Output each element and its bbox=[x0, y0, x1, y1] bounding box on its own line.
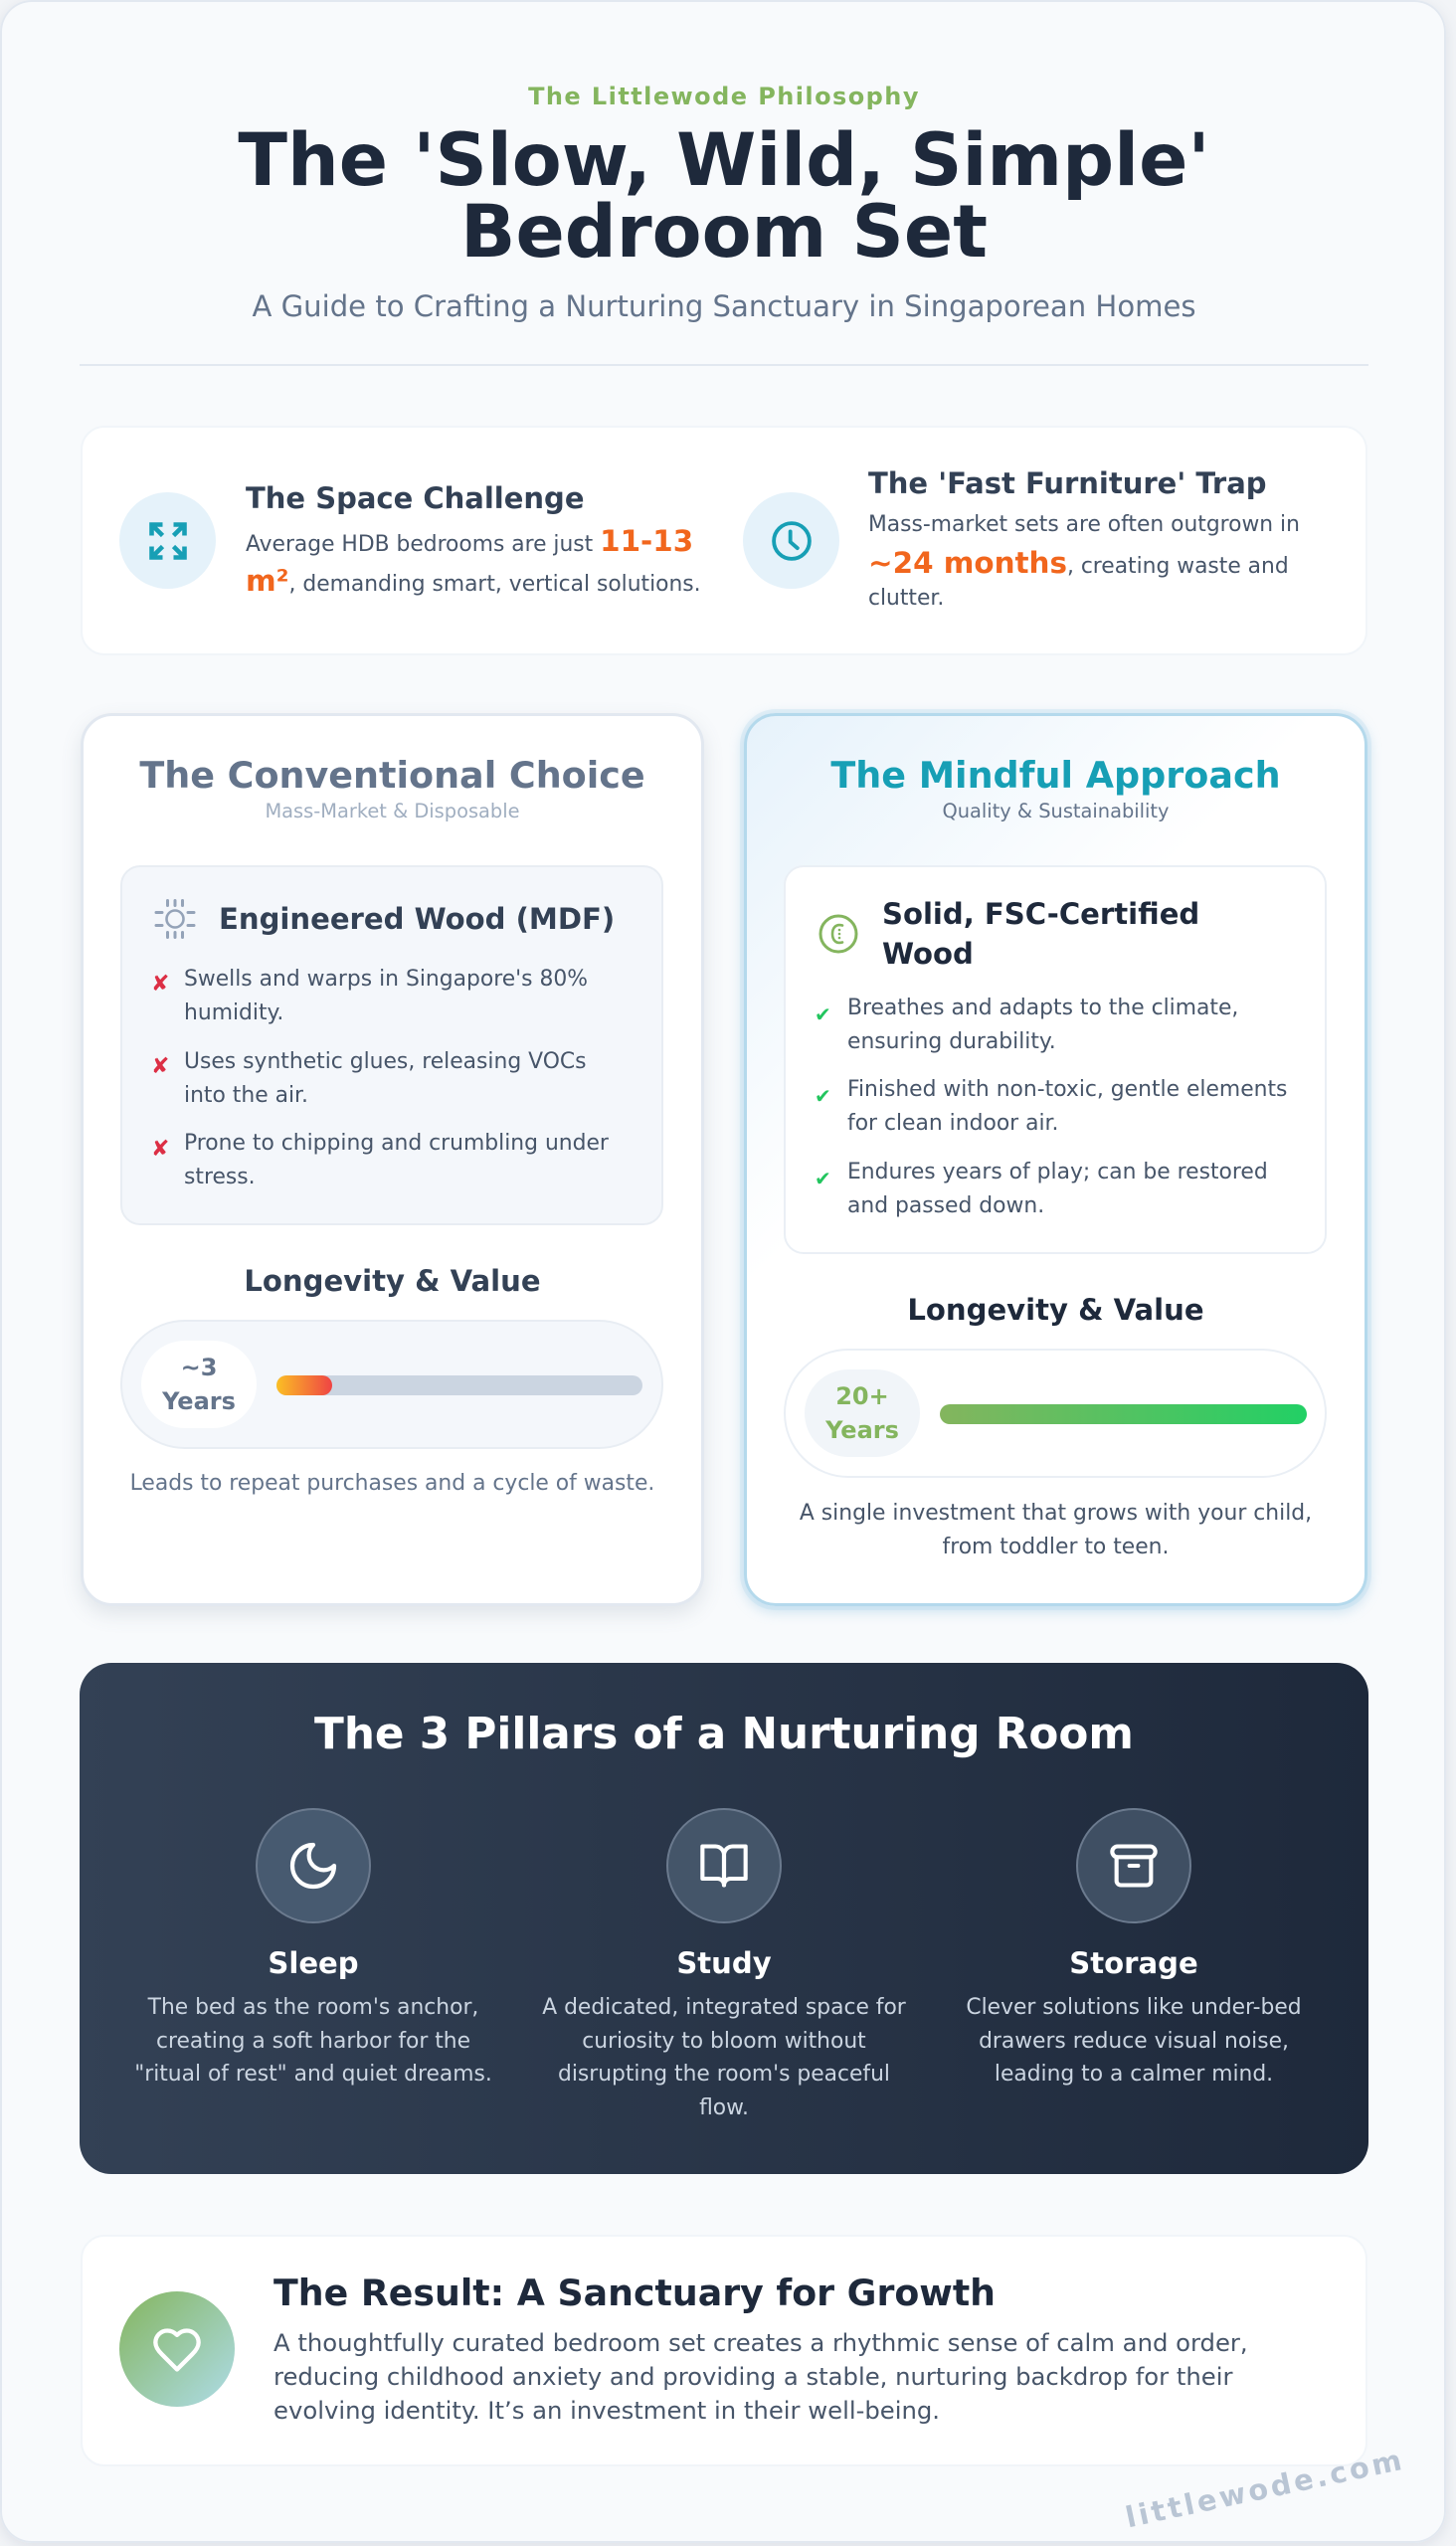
drawback 3 bbox=[151, 1131, 609, 1189]
list: benefits bbox=[815, 996, 1287, 1218]
body text: m², demanding smart, vertical solutions. bbox=[246, 564, 701, 598]
panel: the result bbox=[81, 2235, 1367, 2466]
stat: the space challenge bbox=[246, 481, 701, 598]
drawback 2 bbox=[151, 1049, 587, 1108]
drawback 1 bbox=[151, 967, 588, 1025]
panel: the 3 pillars bbox=[80, 1663, 1368, 2174]
description: leading to a calmer mind. bbox=[995, 2062, 1273, 2087]
benefit 2: Finished with non-toxic, gentle elements bbox=[847, 1077, 1287, 1102]
years badge bbox=[805, 1369, 920, 1457]
drawback 1: humidity. bbox=[184, 1000, 283, 1025]
body text: Average HDB bedrooms are just 11-13 bbox=[246, 524, 693, 558]
note: from toddler to teen. bbox=[943, 1535, 1169, 1559]
description bbox=[966, 1995, 1302, 2087]
bar bbox=[276, 1375, 642, 1395]
heading: The Space Challenge bbox=[246, 481, 584, 515]
heading: The Result: A Sanctuary for Growth bbox=[273, 2272, 996, 2314]
note: A single investment that grows with your child, bbox=[800, 1501, 1312, 1526]
title: Bedroom Set bbox=[460, 191, 988, 274]
icon: certified bbox=[819, 915, 857, 953]
years badge bbox=[141, 1341, 257, 1428]
watermark: littlewode.com bbox=[1123, 2443, 1407, 2534]
drawback 2: Uses synthetic glues, releasing VOCs bbox=[184, 1049, 587, 1074]
years badge: 20+ bbox=[835, 1382, 889, 1410]
benefit 1: ✔ bbox=[815, 1002, 831, 1026]
benefit 2 bbox=[815, 1077, 1287, 1136]
bar bbox=[940, 1404, 1307, 1424]
benefit 2: for clean indoor air. bbox=[847, 1111, 1058, 1136]
benefit 3: ✔ bbox=[815, 1167, 831, 1190]
description: A dedicated, integrated space for bbox=[542, 1995, 906, 2020]
material heading: Engineered Wood (MDF) bbox=[219, 902, 615, 936]
benefit 3: and passed down. bbox=[847, 1193, 1044, 1218]
drawback 2: into the air. bbox=[184, 1083, 308, 1108]
heading: The Conventional Choice bbox=[139, 754, 645, 797]
description: Clever solutions like under-bed bbox=[966, 1995, 1302, 2020]
subheading: Quality & Sustainability bbox=[942, 800, 1170, 822]
pillar: study bbox=[542, 1808, 906, 2120]
panel: the conventional choice bbox=[81, 713, 704, 1606]
drawback 1: Swells and warps in Singapore's 80% bbox=[184, 967, 588, 992]
drawback 3: stress. bbox=[184, 1165, 256, 1189]
material heading: Solid, FSC-Certified bbox=[882, 897, 1199, 931]
years badge: Years bbox=[825, 1416, 899, 1444]
heading: The Mindful Approach bbox=[830, 754, 1281, 797]
pillar: sleep bbox=[134, 1808, 492, 2087]
body text: ~24 months, creating waste and bbox=[868, 546, 1289, 580]
description: drawers reduce visual noise, bbox=[979, 2029, 1289, 2054]
longevity meter bbox=[784, 1349, 1327, 1478]
benefit 1: Breathes and adapts to the climate, bbox=[847, 996, 1238, 1020]
body text bbox=[246, 524, 701, 598]
header bbox=[80, 83, 1368, 366]
description: flow. bbox=[699, 2095, 749, 2120]
material box: solid wood bbox=[784, 865, 1327, 1254]
label: Storage bbox=[1069, 1946, 1198, 1980]
description bbox=[134, 1995, 492, 2087]
note: Leads to repeat purchases and a cycle of waste. bbox=[130, 1471, 654, 1496]
label: Sleep bbox=[268, 1946, 359, 1980]
icon: chip bbox=[155, 899, 195, 939]
panel: context stats bbox=[81, 426, 1367, 655]
benefit 3: Endures years of play; can be restored bbox=[847, 1160, 1268, 1184]
icon: open book bbox=[666, 1808, 782, 1923]
icon: archive box bbox=[1076, 1808, 1191, 1923]
label: Study bbox=[676, 1946, 772, 1980]
description bbox=[542, 1995, 906, 2120]
body text: Mass-market sets are often outgrown in bbox=[868, 512, 1300, 537]
pillar: storage bbox=[966, 1808, 1302, 2087]
icon: expand arrows bbox=[119, 492, 216, 589]
drawback 2: ✘ bbox=[151, 1054, 169, 1079]
description: curiosity to bloom without bbox=[582, 2029, 866, 2054]
material heading: Wood bbox=[882, 937, 974, 971]
icon: clock bbox=[743, 492, 839, 589]
icon: heart bbox=[119, 2291, 235, 2407]
title: The 'Slow, Wild, Simple' bbox=[238, 119, 1210, 203]
title bbox=[238, 119, 1210, 274]
body text: reducing childhood anxiety and providing a stable, nurturing backdrop for their bbox=[273, 2362, 1232, 2391]
body text: clutter. bbox=[868, 586, 944, 611]
body text: A thoughtfully curated bedroom set creates a rhythmic sense of calm and order, bbox=[273, 2328, 1248, 2357]
list: drawbacks bbox=[151, 967, 609, 1189]
stat: the fast furniture trap bbox=[868, 466, 1300, 611]
heading: The 'Fast Furniture' Trap bbox=[868, 466, 1267, 500]
material heading bbox=[882, 897, 1199, 971]
material box: MDF bbox=[120, 865, 663, 1225]
note bbox=[800, 1501, 1312, 1559]
longevity meter bbox=[120, 1320, 663, 1449]
years badge: Years bbox=[162, 1387, 236, 1415]
benefit 1: ensuring durability. bbox=[847, 1029, 1056, 1054]
description: disrupting the room's peaceful bbox=[558, 2062, 890, 2087]
icon: moon bbox=[256, 1808, 371, 1923]
description: creating a soft harbor for the bbox=[156, 2029, 470, 2054]
body text bbox=[868, 512, 1300, 611]
benefit 2: ✔ bbox=[815, 1084, 831, 1108]
heading: longevity: Longevity & Value bbox=[907, 1293, 1204, 1327]
panel: the mindful approach bbox=[744, 713, 1367, 1606]
drawback 1: ✘ bbox=[151, 972, 169, 997]
heading: The 3 Pillars of a Nurturing Room bbox=[314, 1709, 1134, 1759]
benefit 3 bbox=[815, 1160, 1268, 1218]
subtitle: A Guide to Crafting a Nurturing Sanctuary in Singaporean Homes bbox=[252, 289, 1196, 323]
drawback 3: ✘ bbox=[151, 1137, 169, 1162]
description: "ritual of rest" and quiet dreams. bbox=[134, 2062, 492, 2087]
drawback 3: Prone to chipping and crumbling under bbox=[184, 1131, 609, 1156]
description: The bed as the room's anchor, bbox=[148, 1995, 478, 2020]
body text bbox=[273, 2328, 1248, 2425]
eyebrow: The Littlewode Philosophy bbox=[528, 83, 920, 110]
benefit 1 bbox=[815, 996, 1238, 1054]
years badge: ~3 bbox=[181, 1354, 217, 1381]
heading: longevity: Longevity & Value bbox=[244, 1264, 541, 1298]
body text: evolving identity. It’s an investment in their well-being. bbox=[273, 2396, 940, 2425]
subheading: Mass-Market & Disposable bbox=[265, 800, 520, 822]
